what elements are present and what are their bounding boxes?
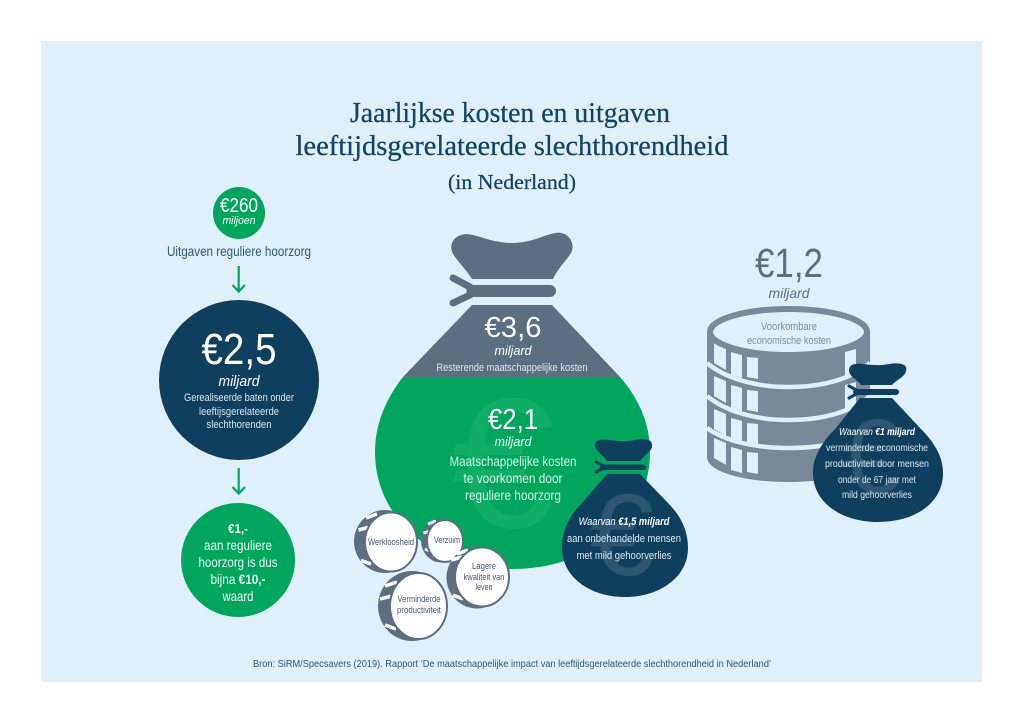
money bag: 3,6 + 2,1 miljard: [375, 233, 650, 569]
source note: Bron: SiRM/Specsavers (2019). Rapport ‘De maatschappelijke impact van leeftijdsgerelateerde slechthorendheid in Nederland’: [253, 658, 771, 670]
miljard label grey: miljard: [494, 343, 532, 358]
watermark euro sign: €: [452, 361, 554, 567]
coin: lagere kwaliteit van leven: [446, 546, 509, 608]
bag body grey part: [403, 305, 620, 377]
circle: 2,5 miljard baten: leeftijsgerelateerde: [199, 406, 279, 418]
small money bag: 1 miljard: Waarvan €1 miljard: [839, 427, 916, 438]
small money bag: 1,5 miljard: €: [590, 470, 654, 600]
small money bag: 1,5 miljard: Waarvan €1,5 miljard: [578, 516, 670, 528]
circle: 1 euro is bijna 10 euro waard: €1,-: [228, 521, 248, 536]
bag rope band: [468, 285, 556, 297]
stack label: [747, 321, 831, 347]
text: kosten te voorkomen: reguliere hoorzorg: [465, 487, 561, 503]
small money bag: 1 miljard: mild gehoorverlies: [842, 490, 912, 501]
coin: verminderde productiviteit: productiviteit: [397, 605, 441, 616]
circle: 2,5 miljard baten: €2,5: [202, 325, 276, 374]
coin: werkloosheid: [354, 510, 417, 573]
amount 1,2 miljard: €1,2: [755, 240, 823, 286]
text: uitgaven reguliere hoorzorg: Uitgaven reguliere hoorzorg: [167, 244, 311, 259]
coin: verminderde productiviteit: [378, 571, 447, 641]
stack body: [707, 332, 870, 482]
stack top ellipse: [710, 309, 867, 355]
circle: 260 miljoen: €260: [220, 195, 258, 217]
circle: 2,5 miljard baten: Gerealiseerde baten onder: [184, 392, 294, 404]
text: kosten te voorkomen: te voorkomen door: [464, 470, 563, 486]
arrow: down to euro waarde: [232, 468, 245, 494]
circle: 1 euro is bijna 10 euro waard: hoorzorg is dus: [198, 554, 278, 570]
text: kosten te voorkomen: [450, 453, 576, 503]
bag rope: [453, 278, 470, 303]
small money bag: 1 miljard: [813, 363, 943, 522]
small money bag: 1,5 miljard: met mild gehoorverlies: [576, 550, 672, 562]
small money bag: 1,5 miljard: [562, 439, 688, 600]
coin: werkloosheid: Werkloosheid: [368, 537, 414, 548]
amount 2,1: €2,1: [488, 404, 538, 436]
circle: 2,5 miljard baten: [159, 300, 319, 460]
small money bag: 1 miljard: €: [843, 398, 901, 516]
coin: lagere kwaliteit van leven: leven: [476, 582, 492, 593]
circle: 260 miljoen: [213, 187, 265, 239]
circle: 260 miljoen: miljoen: [222, 215, 256, 227]
text: kosten te voorkomen: Maatschappelijke kosten: [450, 453, 576, 469]
text: resterende kosten: Resterende maatschappelijke kosten: [436, 362, 588, 374]
amount 1,2 miljard: miljard: [768, 285, 811, 301]
coin stack: [707, 309, 870, 482]
bag top knot: [451, 233, 573, 279]
title: (in Nederland): [448, 170, 576, 194]
amount 1,2 miljard: [755, 240, 823, 301]
coin: verminderde productiviteit: Verminderde: [398, 594, 440, 605]
small money bag: 1 miljard: productiviteit door mensen: [825, 459, 929, 470]
title: Jaarlijkse kosten en uitgaven: [350, 98, 670, 129]
coin: verzuim: Verzuim: [434, 535, 460, 546]
stack label: economische kosten: [747, 335, 831, 347]
stack label: Voorkombare: [761, 321, 817, 333]
small money bag: 1,5 miljard: aan onbehandelde mensen: [567, 533, 681, 545]
coin: lagere kwaliteit van leven: Lagere: [472, 561, 496, 572]
circle: 1 euro is bijna 10 euro waard: waard: [222, 588, 254, 604]
coin: verzuim: [421, 518, 463, 562]
miljard label green: miljard: [494, 434, 532, 449]
circle: 2,5 miljard baten: miljard: [218, 373, 260, 390]
circle: 1 euro is bijna 10 euro waard: bijna €10,-: [210, 571, 266, 587]
small money bag: 1 miljard: verminderde economische: [826, 443, 928, 454]
circle: 2,5 miljard baten: slechthorenden: [206, 419, 272, 431]
circle: 1 euro is bijna 10 euro waard: [181, 503, 295, 617]
circle: 1 euro is bijna 10 euro waard: aan reguliere: [204, 537, 272, 553]
small money bag: 1 miljard: onder de 67 jaar met: [838, 475, 916, 486]
title: leeftijdsgerelateerde slechthorendheid: [296, 131, 728, 162]
bag body green part: [375, 377, 650, 569]
arrow: down to baten: [232, 266, 245, 292]
coin: lagere kwaliteit van leven: kwaliteit van: [464, 572, 504, 583]
amount 3,6: €3,6: [484, 312, 542, 344]
title: [296, 98, 728, 194]
